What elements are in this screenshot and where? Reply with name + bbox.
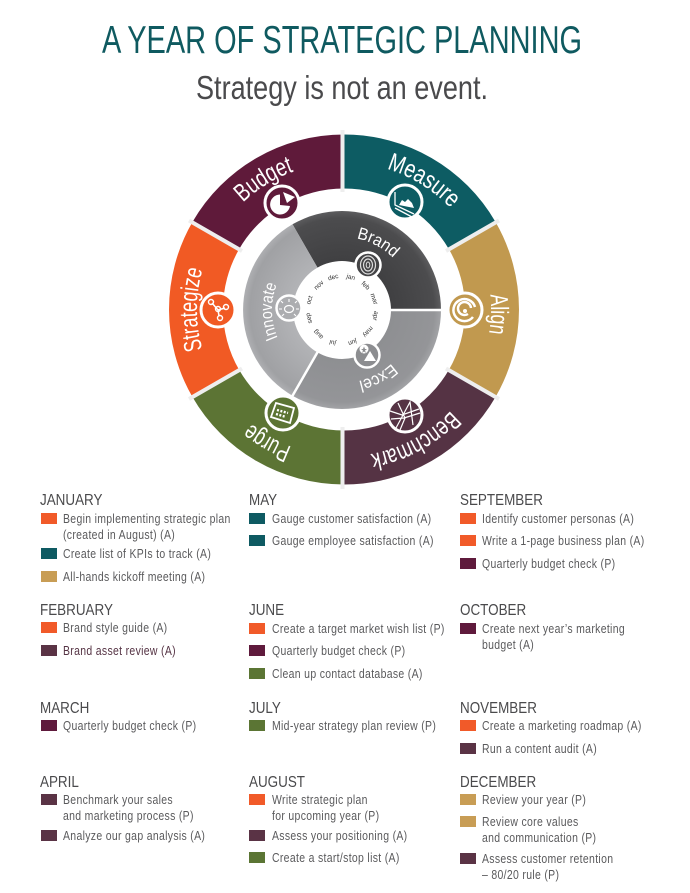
inner segment: Innovate: Innovate [262,283,278,342]
month: December [460,774,613,882]
month: October: Create next year’s marketing [482,621,625,636]
month ring labels: nov [313,279,326,292]
month: April: APRIL [40,774,79,791]
month: August: for upcoming year (P) [272,808,379,823]
month: February [40,602,176,658]
month: February: FEBRUARY [40,602,113,619]
month: March: Quarterly budget check (P) [63,718,196,733]
month: May: Gauge employee satisfaction (A) [272,533,434,548]
icon: strategize flow [201,293,235,327]
icon: excel star and triangle [354,342,380,368]
month: January: All-hands kickoff meeting (A) [63,569,205,584]
outer segment: Purge [194,372,340,484]
outer segment: Strategize: Strategize [180,268,203,352]
month: December: DECEMBER [460,774,536,791]
month ring labels: apr [371,311,379,322]
month: January: JANUARY [40,492,102,509]
outer segment: Measure: Measure [388,153,458,206]
outer segment: Budget [193,134,340,248]
month ring labels: aug [312,328,325,340]
icon: innovate light bulb [276,296,302,320]
month ring labels: sep [305,312,314,324]
outer segment: Benchmark [344,372,494,484]
month: May: Gauge customer satisfaction (A) [272,511,431,526]
icon: purge list [266,396,300,430]
month: July: JULY [249,700,281,717]
inner segment: Innovate [243,224,318,395]
icon: brand fingerprint [356,252,380,278]
month: August: Write strategic plan [272,792,368,807]
month: October [460,602,625,652]
icon: measure chart [388,185,422,219]
month: June: Quarterly budget check (P) [272,643,405,658]
month: November: NOVEMBER [460,700,537,717]
month: February: Brand style guide (A) [63,620,167,635]
month ring labels: oct [305,295,315,305]
month: August: Assess your positioning (A) [272,828,407,843]
month: July [249,700,436,733]
month: February: Brand asset review (A) [63,643,176,658]
month ring labels: jun [347,337,359,347]
month ring labels [305,273,379,347]
icon: budget pie [265,186,299,220]
month: June: JUNE [249,602,284,619]
month: June [249,602,445,681]
outer segment: Purge: Purge [245,426,290,462]
wheel [169,130,519,489]
icon: benchmark lines [388,398,422,432]
outer segment: Align: Align [486,294,510,334]
month: June: Clean up contact database (A) [272,666,423,681]
month: August: AUGUST [249,774,305,791]
subtitle: Strategy is not an event. [196,69,488,106]
outer segment: Measure [344,134,495,248]
month: November: Run a content audit (A) [482,741,597,756]
month: August [249,774,407,865]
month: November [460,700,642,756]
month ring labels: dec [327,273,340,282]
inner segment: Excel [294,311,441,409]
month: September: Write a 1-page business plan (A) [482,533,645,548]
month: January: Begin implementing strategic plan [63,511,231,526]
month: December: Review your year (P) [482,792,586,807]
month ring labels: jan [345,273,356,282]
month: December: and communication (P) [482,830,596,845]
month: September: Quarterly budget check (P) [482,556,615,571]
month: October: budget (A) [482,637,534,652]
month: June: Create a target market wish list (P) [272,621,445,636]
month: March: MARCH [40,700,89,717]
month: January: Create list of KPIs to track (A) [63,546,211,561]
month: July: Mid-year strategy plan review (P) [272,718,436,733]
month: December: Assess customer retention [482,851,613,866]
inner segment: Excel: Excel [360,364,398,393]
month: November: Create a marketing roadmap (A) [482,718,642,733]
month ring labels: may [361,325,374,339]
month: September [460,492,645,571]
month: January [40,492,231,584]
month: September: Identify customer personas (A) [482,511,634,526]
icon: align spiral [448,293,482,327]
month: December: Review core values [482,814,579,829]
month ring labels: jul [328,338,338,347]
month: December: – 80/20 rule (P) [482,867,559,882]
outer segment: Align [450,224,519,396]
outer segment: Strategize [169,224,238,396]
month: March [40,700,196,733]
month: April: Analyze our gap analysis (A) [63,828,205,843]
month: April: and marketing process (P) [63,808,194,823]
month: May: MAY [249,492,277,509]
month: September: SEPTEMBER [460,492,543,509]
month ring labels: feb [360,280,371,292]
month: October: OCTOBER [460,602,526,619]
month: August: Create a start/stop list (A) [272,850,400,865]
month: January: (created in August) (A) [63,527,175,542]
month: May [249,492,434,548]
month: April [40,774,205,843]
outer segment: Benchmark: Benchmark [370,412,462,471]
inner segment: Brand: Brand [358,227,401,258]
month ring labels: mar [369,293,379,306]
outer segment: Budget: Budget [232,157,294,202]
inner segment: Brand [292,211,441,309]
month: April: Benchmark your sales [63,792,173,807]
